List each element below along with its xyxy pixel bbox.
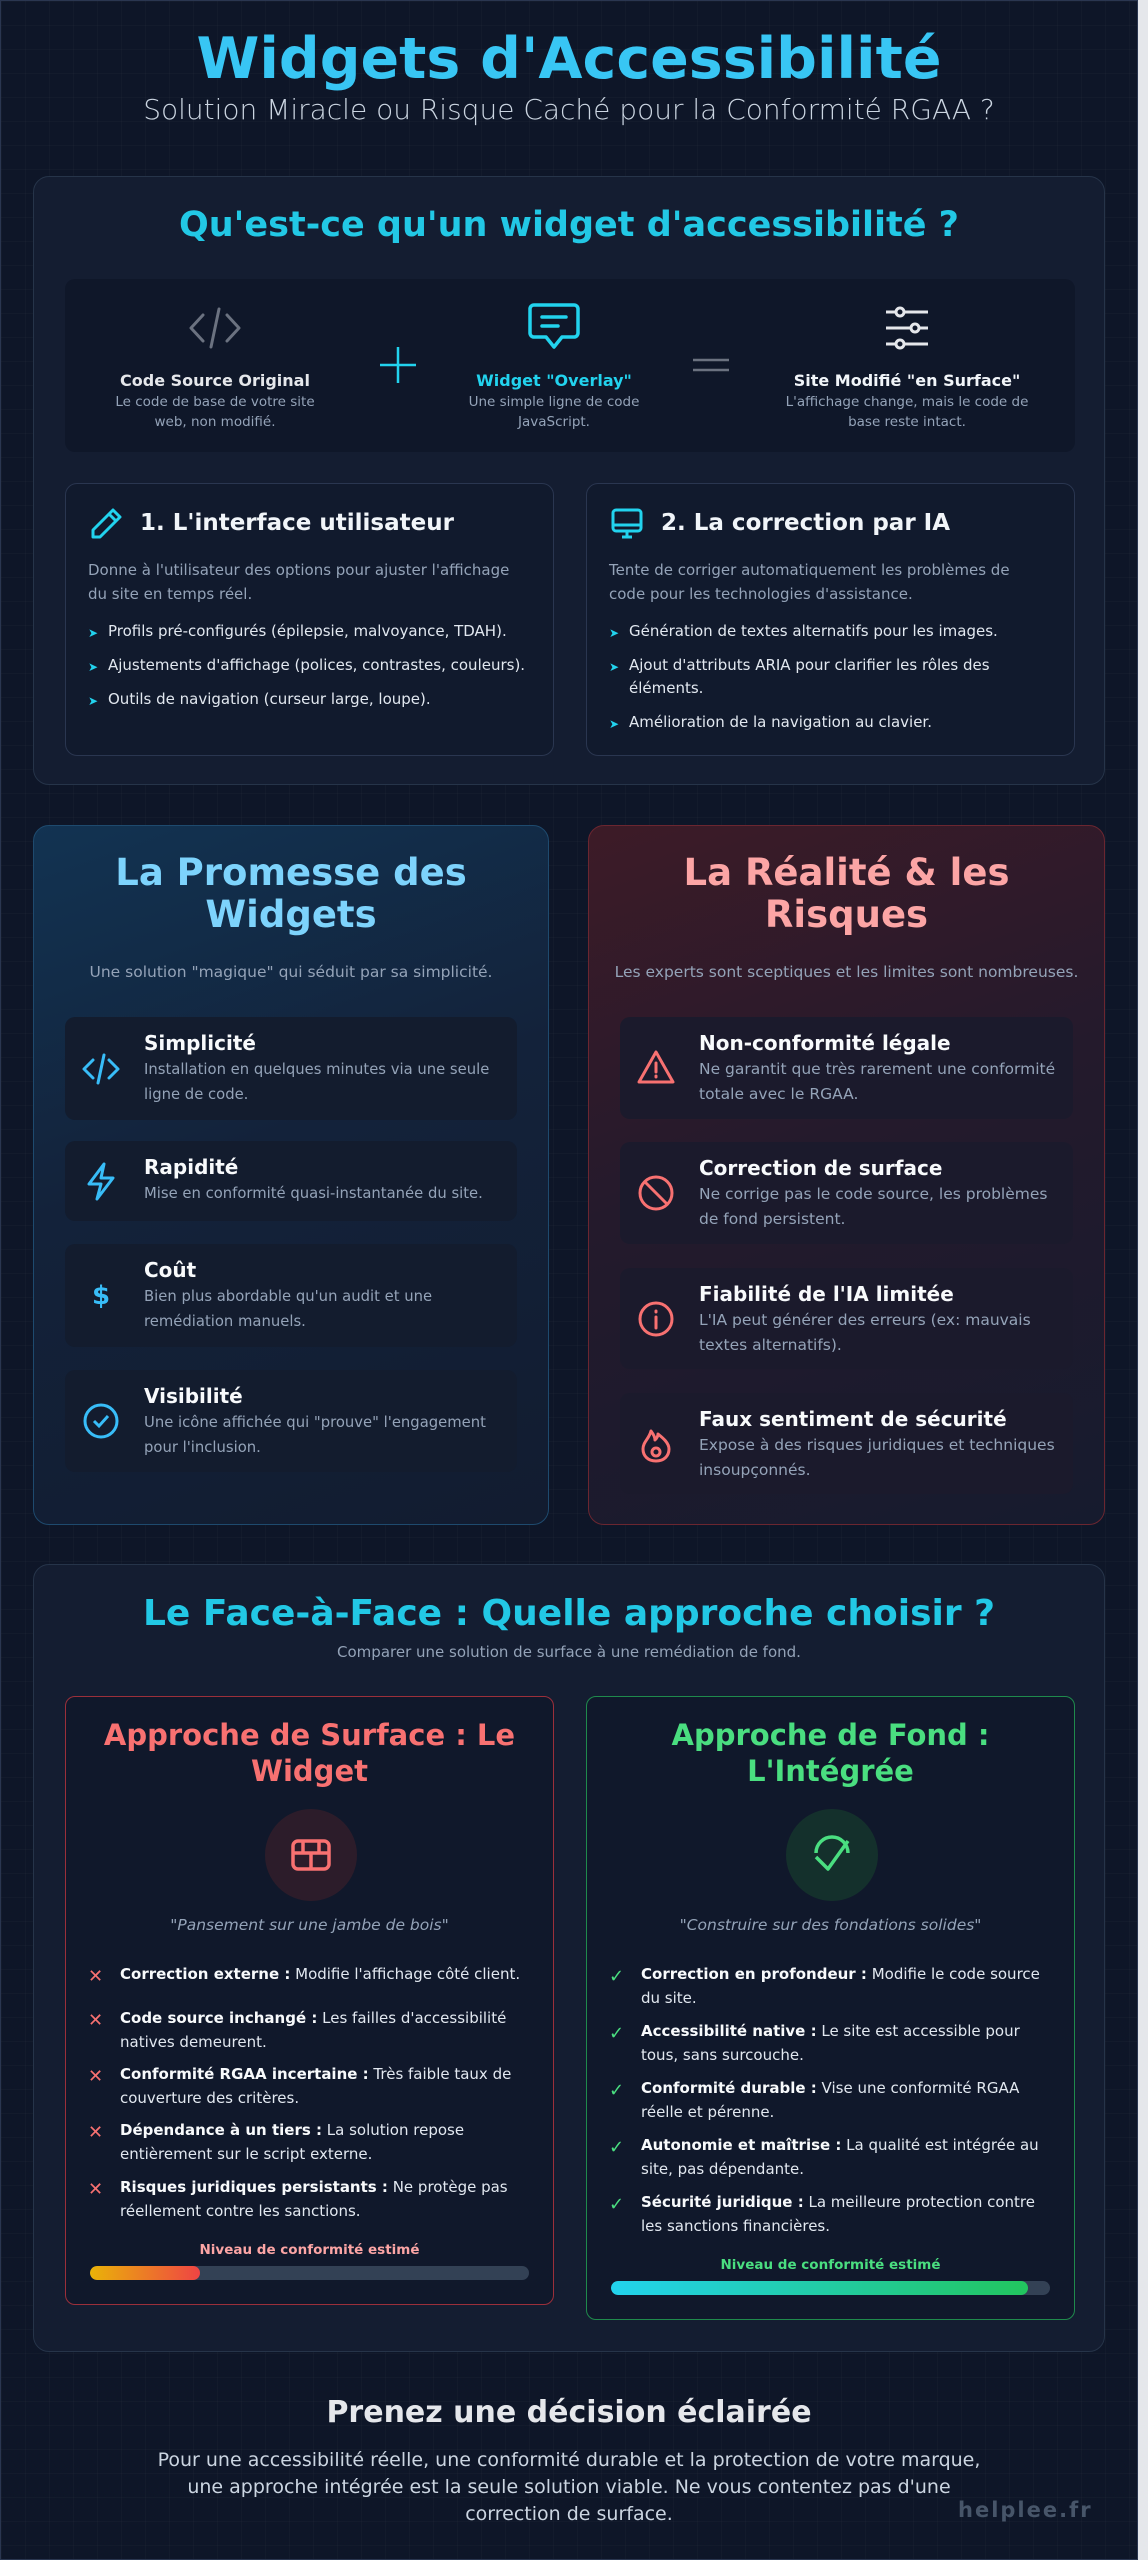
- progress bar: surface: [90, 2242, 529, 2280]
- item: AI reliability: L'IA peut générer des erreurs (ex: mauvais textes alternatifs).: [699, 1311, 1031, 1354]
- progress bar: surface: Niveau de conformité estimé: [199, 2242, 420, 2258]
- heading: reality: Risques: [765, 893, 928, 936]
- item: surface: [620, 1142, 1073, 1244]
- item: surface: Ne corrige pas le code source, les problèmes de fond persistent.: [699, 1185, 1047, 1228]
- heading: what is: Qu'est-ce qu'un widget d'accessibilité ?: [179, 205, 959, 245]
- card: integrated approach: ✓: [609, 1966, 624, 1987]
- item: AI reliability: [620, 1268, 1073, 1369]
- card: user interface: 1. L'interface utilisateur: [140, 510, 454, 536]
- item: simplicity: Simplicité: [144, 1031, 256, 1055]
- item: cost: Coût: [144, 1258, 196, 1282]
- card: AI correction: 2. La correction par IA: [661, 510, 950, 536]
- footer heading: Prenez une décision éclairée: [326, 2395, 812, 2430]
- heading: promise: [115, 851, 467, 936]
- card: surface approach: ✕: [88, 1966, 103, 1987]
- card: user interface: [65, 483, 554, 756]
- card: user interface: Donne à l'utilisateur des options pour ajuster l'affichage du site en temps réel.: [88, 561, 509, 603]
- progress bar: integrated: Niveau de conformité estimé: [720, 2257, 940, 2273]
- heading: face to face: Le Face-à-Face : Quelle approche choisir ?: [143, 1593, 995, 1634]
- item: false security: Expose à des risques juridiques et techniques insoupçonnés.: [699, 1436, 1055, 1479]
- card: integrated approach: Sécurité juridique : La meilleure protection contre les sanctions financières.: [641, 2193, 1035, 2235]
- column: widget overlay: JavaScript.: [518, 414, 590, 430]
- column: code source: web, non modifié.: [154, 414, 276, 430]
- item: false security: [620, 1393, 1073, 1494]
- card: AI correction: [586, 483, 1075, 756]
- card: surface approach: ✕: [88, 2010, 103, 2031]
- item: cost: Bien plus abordable qu'un audit et une remédiation manuels.: [144, 1288, 432, 1330]
- card: user interface: Outils de navigation (curseur large, loupe).: [108, 690, 431, 708]
- card: integrated approach: Conformité durable : Vise une conformité RGAA réelle et pérenne.: [641, 2079, 1019, 2121]
- item: false security: Faux sentiment de sécurité: [699, 1407, 1007, 1431]
- item: legal: Ne garantit que très rarement une conformité totale avec le RGAA.: [699, 1060, 1055, 1103]
- card: surface approach: Code source inchangé : Les failles d'accessibilité natives demeurent.: [120, 2009, 506, 2051]
- icon: sliders: [886, 306, 928, 350]
- card: AI correction: code pour les technologies d'assistance.: [609, 585, 913, 603]
- item: cost: $: [92, 1280, 110, 1310]
- progress bar: integrated: [611, 2257, 1050, 2295]
- card: surface approach: Approche de Surface : Le: [104, 1718, 515, 1752]
- icon: equals: [693, 358, 729, 372]
- icon: chat: [528, 303, 580, 349]
- column: code source: [115, 308, 315, 430]
- column: modified site: [786, 306, 1028, 430]
- panel: face to face: [33, 1564, 1105, 2352]
- panel: reality and risks: [588, 825, 1105, 1525]
- heading: reality: La Réalité & les: [684, 851, 1009, 894]
- item: surface: Correction de surface: [699, 1156, 942, 1180]
- icon: monitor: [612, 508, 642, 538]
- card: integrated approach: Correction en profondeur : Modifie le code source du site.: [641, 1965, 1040, 2007]
- item: cost: [65, 1244, 517, 1347]
- card: AI correction: Amélioration de la navigation au clavier.: [629, 713, 932, 731]
- card: integrated approach: Autonomie et maîtrise : La qualité est intégrée au site, pas dépendante.: [641, 2136, 1039, 2178]
- item: legal: [620, 1017, 1073, 1119]
- card: surface approach: Conformité RGAA incertaine : Très faible taux de couverture des critères.: [120, 2065, 511, 2107]
- icon: pencil: [92, 508, 122, 538]
- card: user interface: Profils pré-configurés (épilepsie, malvoyance, TDAH).: [108, 622, 507, 640]
- subtitle: Solution Miracle ou Risque Caché pour la Conformité RGAA ?: [143, 93, 995, 126]
- card: integrated approach: [586, 1696, 1075, 2320]
- icon: check gauge: [786, 1809, 878, 1901]
- item: legal: Non-conformité légale: [699, 1031, 951, 1055]
- panel: reality and risks: Les experts sont sceptiques et les limites sont nombreuses.: [615, 963, 1078, 981]
- card: user interface: Ajustements d'affichage (polices, contrastes, couleurs).: [108, 656, 525, 674]
- heading: reality: [684, 851, 1009, 936]
- item: speed: Rapidité: [144, 1155, 238, 1179]
- card: integrated approach: L'Intégrée: [747, 1754, 914, 1788]
- card: surface approach: "Pansement sur une jambe de bois": [170, 1916, 449, 1934]
- card: surface approach: [65, 1696, 554, 2305]
- column: code source: Le code de base de votre site: [115, 394, 315, 410]
- panel: what is a widget: [33, 176, 1105, 785]
- panel: face to face: Comparer une solution de surface à une remédiation de fond.: [337, 1643, 801, 1661]
- panel: promise: Une solution "magique" qui séduit par sa simplicité.: [90, 963, 492, 981]
- card: AI correction: Tente de corriger automatiquement les problèmes de: [609, 561, 1010, 579]
- card: AI correction: Génération de textes alternatifs pour les images.: [629, 622, 998, 640]
- card: integrated approach: "Construire sur des fondations solides": [680, 1916, 981, 1934]
- title: Widgets d'Accessibilité: [196, 26, 942, 92]
- column: modified site: base reste intact.: [848, 414, 966, 430]
- card: integrated approach: ✓: [609, 2080, 624, 2101]
- icon: plus: [380, 347, 416, 383]
- icon: bandage: [265, 1809, 357, 1901]
- item: visibility: [65, 1370, 517, 1472]
- brand mark: helplee.fr: [958, 2498, 1093, 2522]
- card: surface approach: Widget: [251, 1754, 368, 1788]
- heading: promise: La Promesse des: [115, 851, 467, 894]
- card: surface approach: ✕: [88, 2179, 103, 2200]
- card: integrated approach: Approche de Fond :: [672, 1718, 989, 1752]
- column: widget overlay: Une simple ligne de code: [469, 394, 639, 410]
- column: modified site: Site Modifié "en Surface": [794, 371, 1020, 390]
- heading: promise: Widgets: [205, 893, 377, 936]
- column: widget overlay: [469, 303, 639, 430]
- card: surface approach: Risques juridiques persistants : Ne protège pas réellement contre les sanctions.: [120, 2178, 508, 2220]
- column: modified site: L'affichage change, mais le code de: [786, 394, 1028, 410]
- card: AI correction: Ajout d'attributs ARIA pour clarifier les rôles des éléments.: [629, 656, 990, 697]
- card: integrated approach: ✓: [609, 2137, 624, 2158]
- item: AI reliability: Fiabilité de l'IA limitée: [699, 1282, 954, 1306]
- card: integrated approach: Accessibilité native : Le site est accessible pour tous, sans surcouche.: [641, 2022, 1020, 2064]
- item: speed: Mise en conformité quasi-instantanée du site.: [144, 1185, 483, 1202]
- card: integrated approach: ✓: [609, 2194, 624, 2215]
- card: surface approach: Dépendance à un tiers : La solution repose entièrement sur le script externe.: [120, 2121, 464, 2163]
- column: code source: Code Source Original: [120, 371, 310, 390]
- card: integrated approach: ✓: [609, 2023, 624, 2044]
- item: speed: [65, 1141, 517, 1221]
- footer text: Pour une accessibilité réelle, une conformité durable et la protection de votre marque, une approche intégrée est la seule solution viable. Ne vous contentez pas d'une correction de surface.: [158, 2449, 980, 2525]
- item: simplicity: Installation en quelques minutes via une seule ligne de code.: [144, 1061, 489, 1103]
- item: visibility: Visibilité: [144, 1384, 243, 1408]
- card: surface approach: Correction externe : Modifie l'affichage côté client.: [120, 1965, 520, 1983]
- item: visibility: Une icône affichée qui "prouve" l'engagement pour l'inclusion.: [144, 1414, 486, 1456]
- equation strip: [65, 279, 1075, 452]
- panel: promise: [33, 825, 549, 1525]
- column: widget overlay: Widget "Overlay": [476, 371, 632, 390]
- card: surface approach: ✕: [88, 2122, 103, 2143]
- icon: code: [190, 308, 240, 348]
- item: simplicity: [65, 1017, 517, 1120]
- card: surface approach: ✕: [88, 2066, 103, 2087]
